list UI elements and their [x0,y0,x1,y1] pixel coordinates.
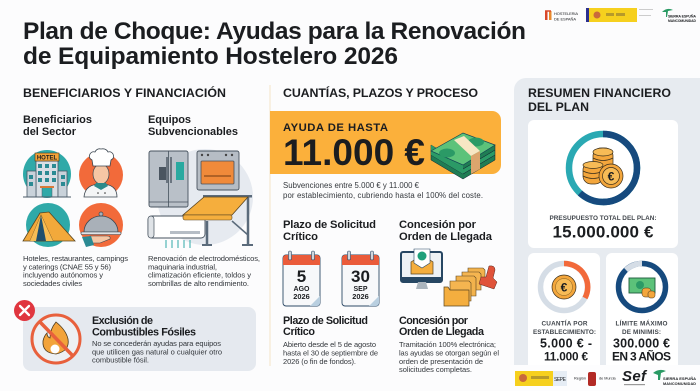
icon: calendar 5 ago: 2026 [293,292,310,301]
text: equipos description [148,254,260,288]
text: plazo description [283,340,378,366]
icon: coins [583,148,623,188]
label: presupuesto: PRESUPUESTO TOTAL DEL PLAN: [550,215,656,222]
card: limite de minimis [606,253,678,371]
heading: concesion secondary: Orden de Llegada [399,326,485,338]
icon: hotel: HOTEL [37,156,57,162]
section heading: beneficiarios: BENEFICIARIOS Y FINANCIACIÓN [23,85,226,100]
text: equipos description: Renovación de electrodomésticos, [148,254,260,263]
heading: exclusion [92,315,196,338]
value: cuantia [540,336,592,364]
text: exclusion description: que utilicen gas natural o cualquier otro [92,348,222,356]
heading: resumen [528,86,671,114]
logos: bottom partners: SEPE [554,377,567,383]
heading: resumen: RESUMEN FINANCIERO [528,86,671,100]
label: cuantia: CUANTÍA POR [542,318,588,328]
text: subvenciones: Subvenciones entre 5.000 € y 11.000 € [283,181,420,190]
subheading: beneficiarios del sector: Beneficiarios [23,114,92,126]
text: concesion description: solicitudes completas. [399,365,472,374]
subheading: equipos subvencionables: Subvencionables [148,126,238,138]
section heading: cuantias: CUANTÍAS, PLAZOS Y PROCESO [283,85,478,100]
icon: coins: € [608,170,615,184]
card: presupuesto total [528,120,678,248]
icon: cash stack [431,133,495,179]
value: limite [612,336,671,364]
label: limite [616,318,668,336]
icon: tent [23,203,75,247]
value: limite: 300.000 € [613,336,670,350]
label: limite: LÍMITE MÁXIMO [616,318,668,328]
logos: top partners: SIERRA ESPUÑA [668,14,696,18]
icon: chef [79,149,123,197]
card: cuantia por establecimiento [528,253,600,371]
logos: top partners: HOSTELERIA [554,11,578,16]
icon: euro coin: € [561,280,568,294]
chart: cuantia ring [540,263,588,310]
icon: calendar 30 sep: 2026 [352,292,369,301]
text: plazo description: Abierto desde el 5 de agosto [283,340,376,349]
icon: calendar 5 ago [283,251,320,306]
icon: cloche [79,203,123,247]
label: cuantia: ESTABLECIMIENTO: [533,329,596,336]
icon: hotel [23,150,71,198]
column divider [270,85,271,366]
title: Plan de Choque: Ayudas para la Renovación [23,18,526,45]
icon: equipment group [148,149,253,248]
icon: red cross badge [14,300,35,321]
value: cuantia: 5.000 € - [540,336,592,350]
text: concesion description: Tramitación 100% electrónica; [399,340,496,349]
icon: calendar 5 ago: AGO [294,286,310,293]
text: exclusion description: combustible fósil. [92,356,149,364]
logos: top partners: MANCOMUNIDAD [668,19,697,23]
title: de Equipamiento Hostelero 2026 [23,43,398,70]
logos: bottom partners: MANCOMUNIDAD [663,382,696,386]
text: subvenciones: por establecimiento, cubriendo hasta el 100% del coste. [283,191,483,200]
middle column [270,85,501,374]
logos: bottom partners [510,365,700,391]
chart: budget ring [569,134,637,202]
icon: calendar 30 sep: 30 [351,267,370,286]
icon: email monitor [401,249,442,289]
subheading: equipos subvencionables: Equipos [148,114,191,126]
icon: no fire [32,315,80,363]
text: concesion description [399,340,499,374]
value: limite: EN 3 AÑOS [612,348,671,364]
banner: ayuda de hasta: AYUDA DE HASTA [283,122,388,134]
icon: calendar 5 ago: 5 [297,267,306,286]
heading: exclusion: Exclusión de [92,315,153,327]
logos: top partners [545,8,697,23]
chart: minimis ring [618,264,666,310]
heading: resumen: DEL PLAN [528,100,589,114]
heading: concesion [399,219,493,243]
text: concesion description: las ayudas se otorgan según el [399,348,499,358]
text: exclusion description [92,339,222,364]
text: equipos description: climatización eficiente, toldos y [148,270,251,280]
heading: concesion secondary: Concesión por [399,315,469,327]
banner: ayuda de hasta: 11.000 € [283,132,425,173]
subheading: beneficiarios del sector: del Sector [23,126,77,138]
subheading: equipos subvencionables [148,114,238,138]
icon: calendar 30 sep: SEP [353,286,368,293]
left column [14,78,700,391]
heading: concesion secondary [399,315,485,338]
heading: plazo [283,219,376,243]
logos: bottom partners: Región [574,376,586,380]
logos: bottom partners: Sef [622,368,648,385]
text: beneficiarios description: sociedades civiles [23,279,82,288]
heading: concesion: Orden de Llegada [399,231,493,243]
panel: resumen financiero [514,78,700,391]
text: concesion description: orden de presentación de [399,357,483,366]
label: limite: DE MINIMIS: [622,329,661,336]
heading: plazo secondary [283,315,368,338]
heading: concesion: Concesión por [399,219,477,231]
heading: plazo secondary: Plazo de Solicitud [283,315,368,327]
subheading: beneficiarios del sector [23,114,92,138]
text: subvenciones [283,181,483,200]
text: equipos description: maquinaria industrial, [148,262,217,272]
banner: ayuda de hasta [270,111,501,179]
text: plazo description: 2026 (o fin de fondos). [283,357,356,366]
heading: plazo secondary: Crítico [283,326,315,338]
heading: exclusion: Combustibles Fósiles [92,326,196,338]
text: beneficiarios description [23,254,128,288]
panel: exclusion combustibles [14,300,256,371]
text: plazo description: hasta el 30 de septiembre de [283,348,378,358]
text: beneficiarios description: Hoteles, restaurantes, campings [23,254,128,263]
icon: folders and stamp [444,266,497,306]
logos: bottom partners: de Murcia [599,376,617,380]
text: equipos description: sombrillas de alto rendimiento. [148,279,249,288]
heading: plazo: Crítico [283,231,318,243]
value: cuantia: 11.000 € [544,350,588,364]
title [23,18,526,70]
label: cuantia [533,318,596,336]
text: beneficiarios description: incluyendo autónomos y [23,270,103,280]
value: presupuesto: 15.000.000 € [552,222,654,242]
logos: top partners: DE ESPAÑA [554,16,576,22]
text: beneficiarios description: y caterings (CNAE 55 y 56) [23,262,111,272]
heading: plazo: Plazo de Solicitud [283,219,376,231]
icon: calendar 30 sep [342,251,379,306]
logos: bottom partners: SIERRA ESPUÑA [663,376,696,381]
icon: banknote and coins [629,278,655,298]
text: exclusion description: No se concederán ayudas para equipos [92,339,221,348]
